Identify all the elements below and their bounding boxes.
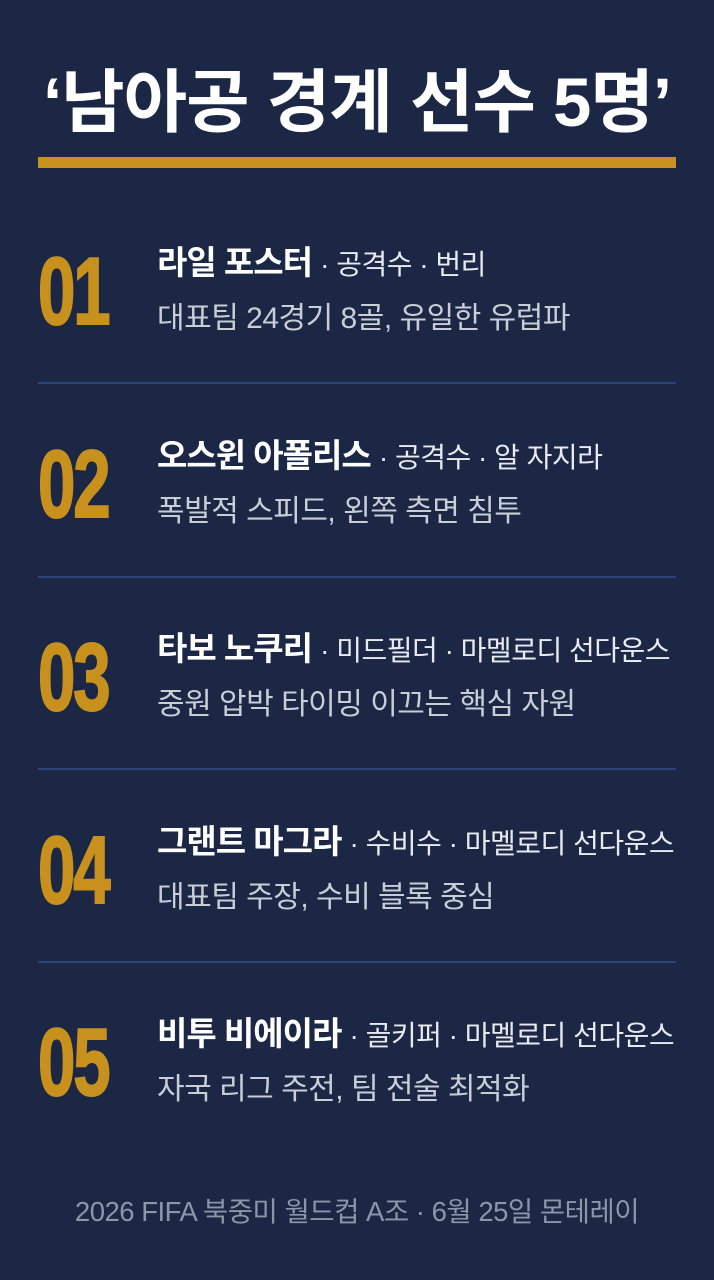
description 05: 자국 리그 주전, 팀 전술 최적화 (157, 1073, 529, 1106)
name 04: 그랜트 마그라 · 수비수 · 마멜로디 선다운스 (157, 823, 674, 860)
name 02: 오스윈 아폴리스 · 공격수 · 알 자지라 (157, 437, 602, 474)
description 04: 대표팀 주장, 수비 블록 중심 (157, 881, 494, 914)
description 03: 중원 압박 타이밍 이끄는 핵심 자원 (157, 688, 576, 721)
number 03: 03 (38, 624, 109, 731)
footer: 2026 FIFA 북중미 월드컵 A조 · 6월 25일 몬테레이 (75, 1196, 639, 1227)
row 03 (38, 624, 670, 731)
row 05 (38, 1009, 674, 1116)
number 02: 02 (38, 431, 109, 538)
number 04: 04 (38, 817, 109, 924)
row 01 (38, 238, 570, 345)
name 05: 비투 비에이라 · 골키퍼 · 마멜로디 선다운스 (157, 1015, 674, 1052)
description 01: 대표팀 24경기 8골, 유일한 유럽파 (157, 302, 570, 335)
row 04 (38, 817, 674, 924)
row 02 (38, 431, 602, 538)
name 01: 라일 포스터 · 공격수 · 번리 (157, 244, 486, 281)
number 05: 05 (38, 1009, 109, 1116)
gold underline bar (38, 157, 676, 168)
name 03: 타보 노쿠리 · 미드필더 · 마멜로디 선다운스 (157, 630, 670, 667)
number 01: 01 (38, 238, 109, 345)
title: ‘남아공 경계 선수 5명’ (43, 64, 671, 141)
description 02: 폭발적 스피드, 왼쪽 측면 침투 (157, 495, 521, 528)
